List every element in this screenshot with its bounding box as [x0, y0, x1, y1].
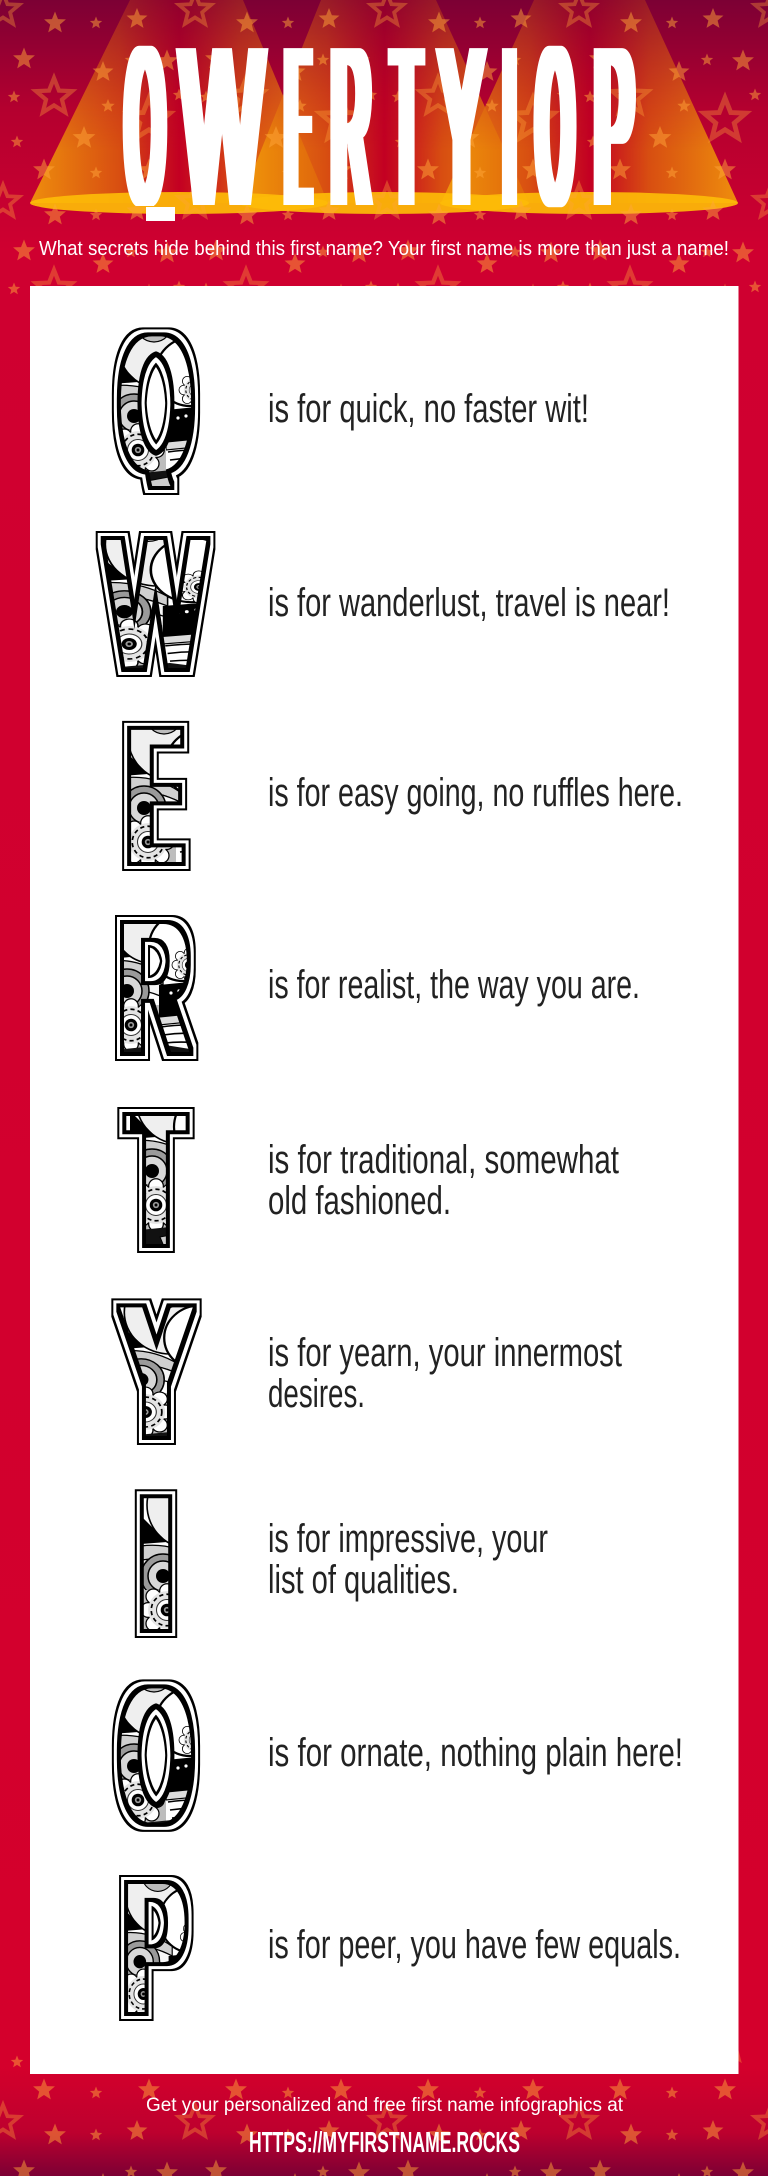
row E: E: [131, 688, 179, 903]
row Q: is for quick, no faster wit!: [268, 387, 589, 431]
title: T: [393, 0, 420, 254]
spotlights: [30, 0, 738, 214]
row Y: [111, 1298, 622, 1445]
row W: [96, 531, 668, 677]
title: Q: [126, 0, 164, 253]
row W: W: [107, 499, 204, 708]
row T: old fashioned.: [268, 1179, 451, 1223]
row T: is for traditional, somewhat: [268, 1138, 619, 1182]
title: O: [537, 0, 573, 254]
row I: is for impressive, your: [268, 1517, 548, 1561]
row R: R: [120, 885, 190, 1092]
row Y: Y: [124, 1267, 189, 1476]
row Q: [112, 327, 586, 495]
row P: P: [125, 1844, 185, 2053]
row Y: desires.: [268, 1372, 365, 1416]
white panel: [30, 286, 738, 2074]
title: P: [595, 1, 633, 254]
title: R: [332, 0, 370, 255]
row R: [115, 915, 638, 1061]
row I: list of qualities.: [268, 1558, 459, 1602]
footer url: HTTPS://MYFIRSTNAME.ROCKS: [249, 2127, 520, 2159]
row T: [117, 1107, 619, 1253]
title: E: [287, 0, 309, 254]
row I: I: [138, 1458, 174, 1670]
row P: [119, 1875, 678, 2021]
row Q: Q: [121, 297, 191, 510]
row I: [134, 1489, 548, 1638]
subtitle: What secrets hide behind this first name? Your first name is more than just a name!: [39, 238, 729, 260]
row E: [122, 720, 680, 871]
row Y: is for yearn, your innermost: [268, 1331, 622, 1375]
star pattern top: [0, 0, 768, 300]
title: I: [505, 0, 514, 254]
title: Y: [439, 0, 484, 254]
row T: T: [130, 1075, 182, 1284]
title: [122, 46, 636, 221]
row O: [112, 1679, 680, 1832]
footer text: Get your personalized and free first name infographics at: [146, 2095, 624, 2116]
row O: O: [121, 1649, 191, 1862]
title: W: [181, 0, 263, 254]
star pattern bottom: [0, 2050, 768, 2176]
